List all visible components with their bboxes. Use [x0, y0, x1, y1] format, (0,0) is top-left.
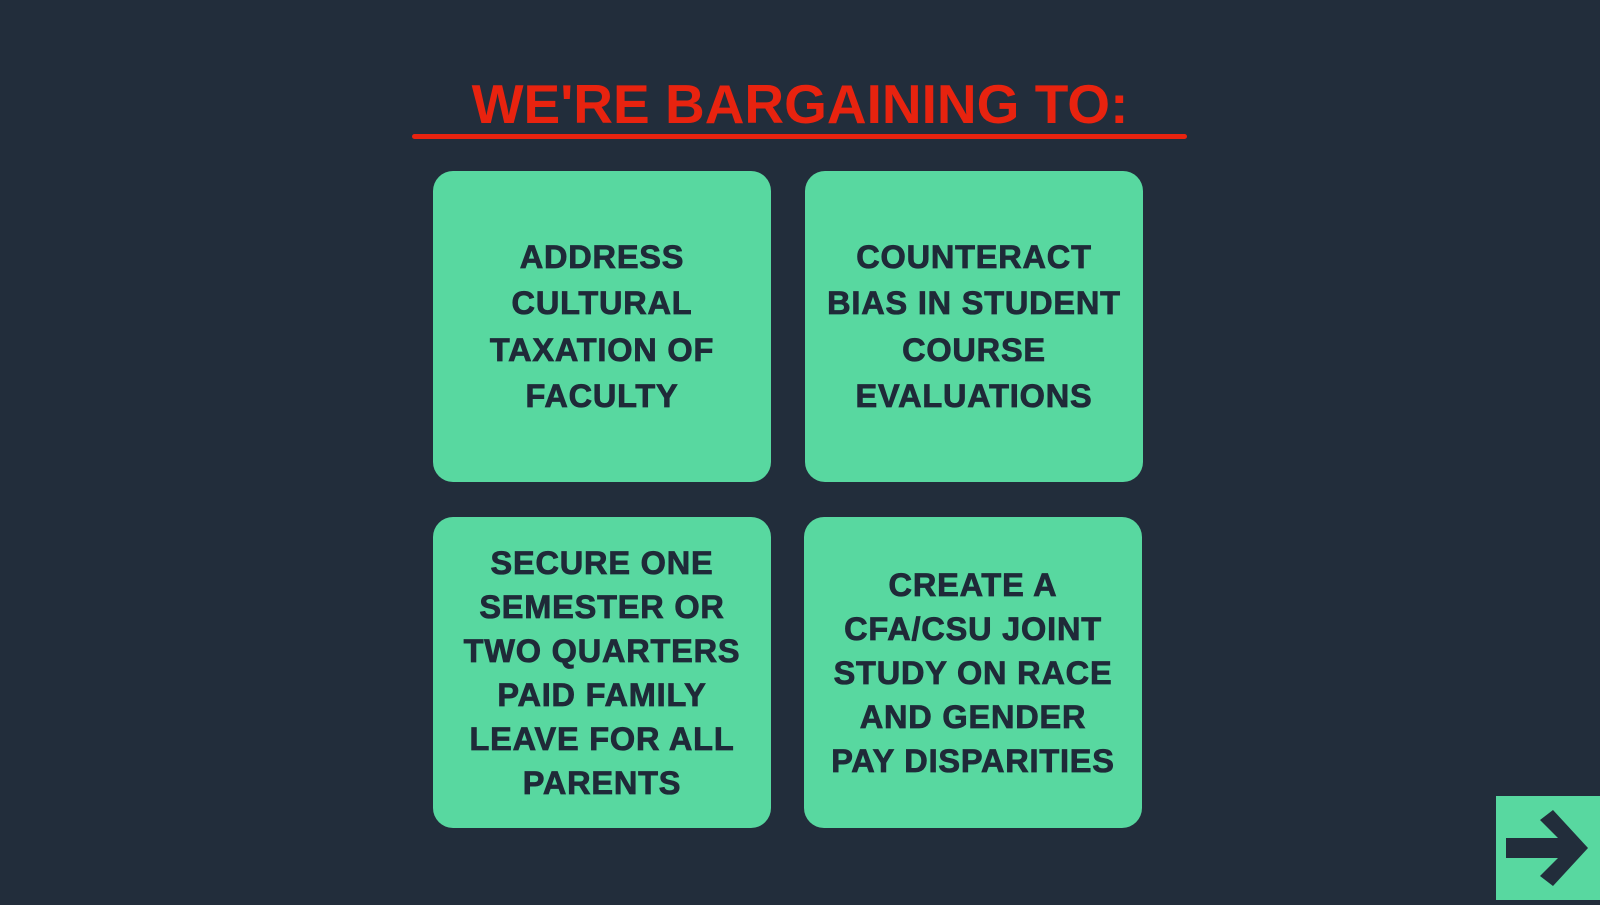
card: student evaluations: EVALUATIONS [856, 378, 1092, 414]
card: joint study: PAY DISPARITIES [831, 742, 1115, 778]
card: paid family leave: LEAVE FOR ALL [470, 720, 734, 756]
card: cultural taxation: TAXATION OF [490, 332, 714, 368]
card: paid family leave: PARENTS [523, 764, 681, 800]
card: paid family leave: SEMESTER OR [479, 588, 725, 624]
card: student evaluations: COURSE [902, 332, 1046, 368]
card: paid family leave: PAID FAMILY [497, 676, 707, 712]
card: student evaluations: COUNTERACT [856, 238, 1092, 274]
card: joint study [804, 517, 1142, 828]
card: joint study: AND GENDER [860, 698, 1086, 734]
card: paid family leave [433, 517, 771, 828]
icon: next arrow [1496, 796, 1600, 900]
card: student evaluations: BIAS IN STUDENT [827, 285, 1121, 321]
card: cultural taxation [433, 171, 771, 482]
card: joint study: CFA/CSU JOINT [844, 610, 1102, 646]
card: cultural taxation: CULTURAL [512, 285, 692, 321]
card: paid family leave: TWO QUARTERS [464, 632, 740, 668]
card: cultural taxation: FACULTY [525, 378, 679, 414]
card: joint study: CREATE A [889, 566, 1057, 602]
title: WE'RE BARGAINING TO: [472, 73, 1128, 135]
card: paid family leave: SECURE ONE [491, 544, 713, 580]
card: student evaluations [805, 171, 1143, 482]
title underline [412, 134, 1187, 139]
card: cultural taxation: ADDRESS [520, 238, 684, 274]
card: joint study: STUDY ON RACE [834, 654, 1112, 690]
